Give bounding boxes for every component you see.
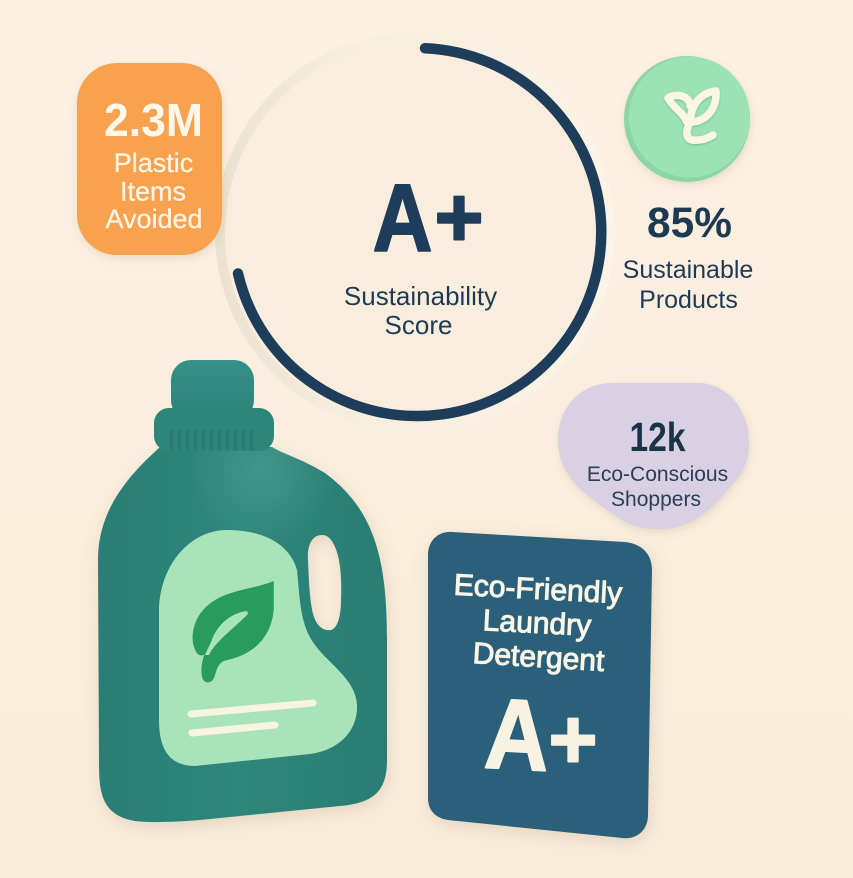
score label: Sustainability — [344, 281, 497, 311]
card title — [453, 569, 623, 678]
card grade: + — [548, 692, 598, 786]
detergent grade card — [428, 532, 652, 838]
score ring panel — [220, 38, 610, 428]
bottle body — [98, 447, 387, 822]
shoppers label: Shoppers — [611, 488, 701, 511]
card grade: A — [482, 678, 552, 793]
icon: sprout — [668, 91, 716, 140]
icon: leaf — [193, 582, 273, 682]
shoppers label: Eco-Conscious — [587, 463, 728, 486]
orange stat label: Items — [120, 176, 186, 206]
score grade: + — [434, 170, 484, 264]
card title: Eco-Friendly — [453, 569, 623, 610]
card grade — [482, 678, 598, 793]
sustainable products stat: Sustainable — [623, 256, 753, 284]
shoppers value: 12k — [630, 414, 686, 460]
orange stat label: Plastic — [114, 148, 193, 178]
card title: Detergent — [472, 637, 606, 678]
orange stat label: Avoided — [105, 204, 203, 234]
score grade: A — [373, 164, 432, 271]
purple shoppers blob — [558, 383, 749, 529]
score ring arc — [238, 48, 601, 416]
sustainable products stat — [623, 199, 753, 314]
score grade — [373, 164, 484, 271]
bottle label — [159, 530, 357, 766]
score label second line: Score — [385, 310, 452, 340]
sustainable products stat: Products — [639, 286, 738, 314]
bottle cap — [154, 360, 274, 451]
green leaf badge — [624, 56, 750, 182]
sustainable products stat: 85% — [647, 199, 732, 247]
label lines — [191, 703, 313, 733]
orange stat value: 2.3M — [104, 94, 203, 146]
card title: Laundry — [482, 604, 592, 643]
detergent bottle — [98, 360, 387, 822]
orange stat card — [77, 63, 222, 255]
